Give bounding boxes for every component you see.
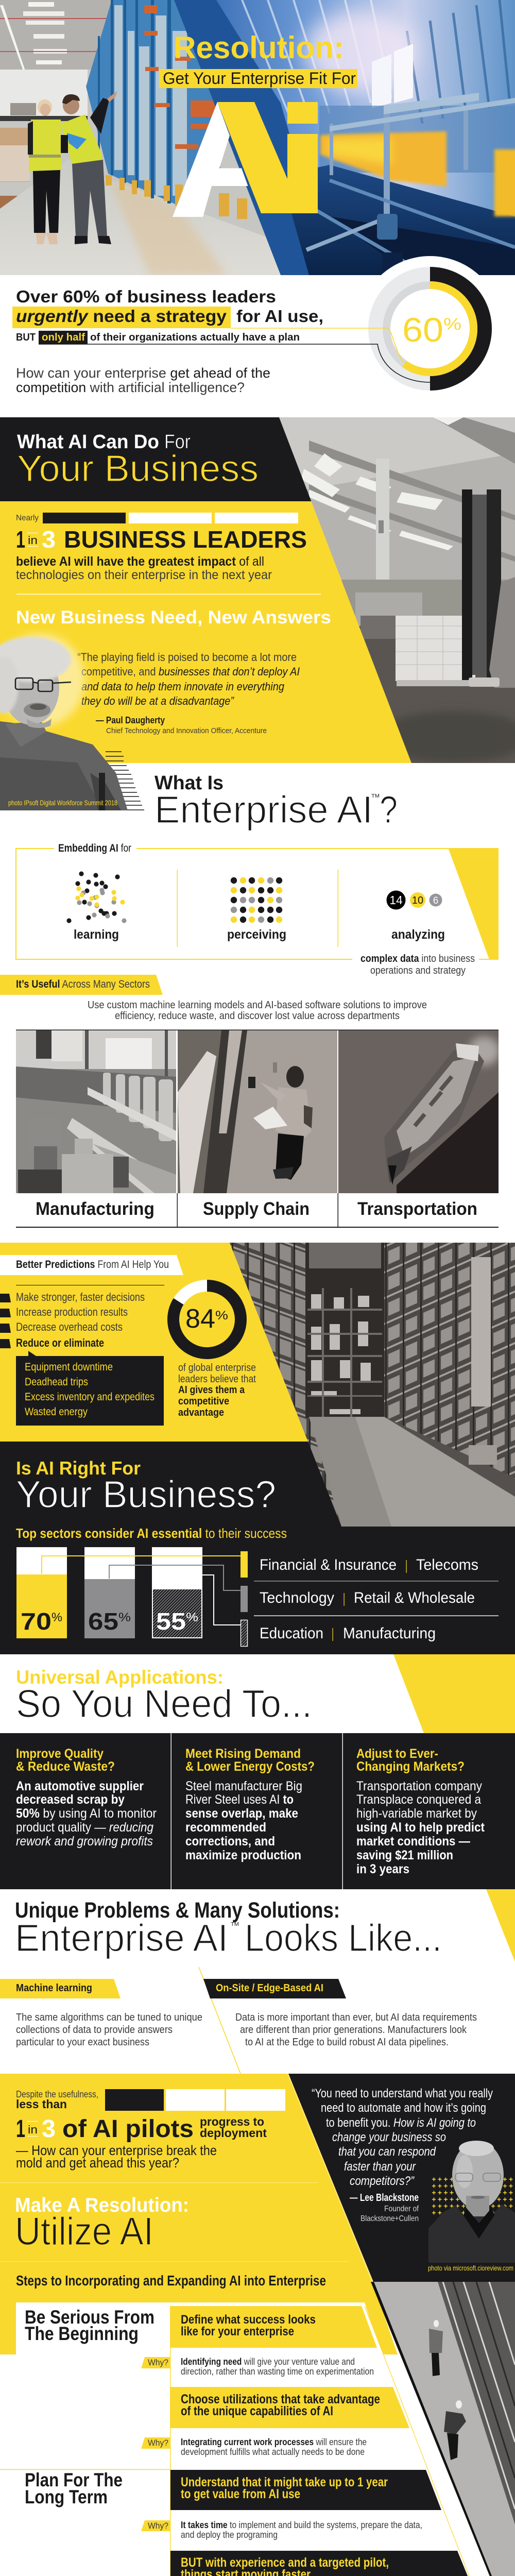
stat: 1 in 3 business leaders: 3 <box>42 526 56 553</box>
text: machine learning description: The same algorithms can be tuned to unique <box>16 2012 202 2023</box>
text: custom machine learning models: efficiency, reduce waste, and discover lost value across departments <box>115 1010 400 1022</box>
photo: portrait of Lee Blackstone <box>428 2141 515 2263</box>
column: improve quality: & Reduce Waste? <box>16 1759 115 1774</box>
step headings left <box>25 2307 161 2576</box>
text: competitive advantage: advantage <box>178 1407 224 1418</box>
stat: 1 in 3 AI pilots: mold and get ahead this year? <box>16 2155 179 2171</box>
donut chart: 84 percent <box>167 1280 247 1359</box>
step: understand one year: Understand that it might take up to 1 year <box>181 2475 388 2489</box>
panel: use case columns <box>0 1733 515 1889</box>
list: benefits: Reduce or eliminate <box>16 1336 104 1349</box>
quote: Paul Daugherty: “The playing field is poised to become a lot more <box>77 651 297 664</box>
column: improve quality: An automotive supplier <box>16 1779 144 1793</box>
column: meet rising demand <box>185 1747 315 1862</box>
label: Supply Chain: Supply Chain <box>203 1199 310 1219</box>
heading: steps: Steps to Incorporating and Expanding AI into Enterprise <box>16 2273 326 2289</box>
step: define success: like for your enterprise <box>181 2325 294 2338</box>
why: identifying need: Why? <box>148 2358 168 2367</box>
why: it takes time: It takes time to implement and build the systems, prepare the data, <box>181 2520 422 2530</box>
column: adjust to changing markets: market conditions — <box>356 1834 470 1849</box>
tab: on-site edge-based AI: On-Site / Edge-Based AI <box>216 1982 323 1994</box>
stat: 1 in 3 AI pilots: Despite the usefulness, <box>16 2089 98 2099</box>
why: integrating processes: development fulfills what actually needs to be done <box>181 2447 365 2457</box>
icon: learning scatter dots <box>66 871 127 923</box>
tab: useful across many sectors <box>0 975 163 995</box>
panel: Lee Blackstone quote <box>288 2074 515 2282</box>
step headings left: Long Term <box>25 2486 108 2507</box>
stat: 1 in 3 business leaders <box>16 513 307 582</box>
heading: is AI right: Your Business? <box>16 1473 276 1516</box>
stat: 1 in 3 AI pilots: in <box>28 2123 38 2136</box>
panel: is AI right for your business <box>16 1458 515 1654</box>
text: edge AI description: to AI at the Edge to build robust AI data pipelines. <box>245 2037 449 2048</box>
stat: 1 in 3 business leaders: BUSINESS LEADERS <box>64 526 307 553</box>
column: meet rising demand: Steel manufacturer Big <box>185 1779 302 1793</box>
heading: new business need: New Business Need, New Answers <box>16 607 331 628</box>
stat: 1 in 3 business leaders: in <box>28 534 38 547</box>
text: competitive advantage: leaders believe that <box>178 1374 256 1385</box>
quote text: faster than your <box>344 2160 416 2174</box>
column: meet rising demand: maximize production <box>185 1848 301 1862</box>
photo: warehouse aisle <box>230 1243 515 1527</box>
text: edge AI description: are different than prior generations. Manufacturers look <box>240 2024 467 2036</box>
heading: make a resolution <box>15 2194 189 2253</box>
panel: unique problems heading: TM <box>231 1922 239 1927</box>
tab: machine learning <box>0 1979 121 1998</box>
heading: what is Enterprise AI: TM <box>371 793 380 799</box>
labels: learning perceiving analyzing: perceiving <box>227 927 286 942</box>
quote: Paul Daugherty: Chief Technology and Innovation Officer, Accenture <box>106 727 267 735</box>
step: understand one year: to get value from AI use <box>181 2487 300 2501</box>
text: machine learning description: collections of data to provide answers <box>16 2024 173 2036</box>
donut chart: 60 percent: 60 <box>402 311 443 349</box>
stat: 1 in 3 business leaders: 1 <box>16 526 25 553</box>
text: custom machine learning models: Use custom machine learning models and AI-based software solutions to improve <box>88 999 427 1011</box>
bar chart: sectors <box>16 1547 202 1638</box>
column: improve quality: Improve Quality <box>16 1747 104 1761</box>
panel: universal applications heading: So You Need To... <box>16 1682 312 1726</box>
step: experience and pilot: BUT with experience and a targeted pilot, <box>181 2555 389 2570</box>
heading: what AI can do <box>17 431 259 489</box>
step: choose utilizations: of the unique capabilities of AI <box>181 2404 333 2418</box>
panel: universal applications heading: Universal Applications: <box>16 1667 224 1688</box>
caption: complex data: complex data into business <box>360 953 475 964</box>
heading: is AI right: Is AI Right For <box>16 1458 141 1479</box>
icon: analyzing number circles: 10 <box>412 895 423 906</box>
quote: Paul Daugherty <box>77 651 300 735</box>
column: improve quality: product quality — reducing <box>16 1820 153 1835</box>
headline text: Over 60% of business leaders <box>16 287 276 306</box>
column: adjust to changing markets: using AI to help predict <box>356 1820 485 1835</box>
panel: make a resolution <box>0 2074 515 2576</box>
tab: better predictions: Better Predictions From AI Help You <box>16 1259 169 1270</box>
stat: 1 in 3 business leaders: believe AI will have the greatest impact of all <box>16 554 264 569</box>
quote: Paul Daugherty: they do will be at a disadvantage” <box>81 694 235 707</box>
photo: manufacturing bottling line <box>16 1030 176 1193</box>
labels: learning perceiving analyzing: analyzing <box>391 927 445 942</box>
quote: Paul Daugherty: and data to help them innovate in everything <box>81 680 285 693</box>
column: adjust to changing markets: saving $21 million <box>356 1848 453 1862</box>
legend: sectors <box>241 1551 499 1647</box>
step: define success: Define what success looks <box>181 2313 316 2327</box>
column: meet rising demand: sense overlap, make <box>185 1806 298 1821</box>
panel: unique problems heading <box>15 1889 515 1962</box>
icon: analyzing number circles <box>386 890 442 910</box>
why: it takes time: Why? <box>148 2521 168 2531</box>
step headings left: Be Serious From <box>25 2307 154 2328</box>
legend: sectors: Retail & Wholesale <box>354 1589 475 1606</box>
why: integrating processes <box>141 2437 367 2457</box>
why: identifying need: Identifying need will give your venture value and <box>181 2357 355 2367</box>
heading: what is Enterprise AI: What Is <box>154 772 224 794</box>
quote text: that you can respond <box>338 2145 436 2159</box>
text: custom machine learning models <box>88 999 427 1022</box>
stat: 1 in 3 AI pilots: — How can your enterprise break the <box>16 2143 217 2158</box>
icon: analyzing number circles: 14 <box>389 893 403 907</box>
icon: male worker <box>61 91 117 244</box>
step headings left: Plan For The <box>25 2469 123 2490</box>
column: improve quality: 50% by using AI to monitor <box>16 1806 157 1821</box>
legend: sectors: Telecoms <box>416 1556 478 1573</box>
callout: waste list <box>16 1351 164 1426</box>
panel: unique problems heading: Unique Problems & Many Solutions: <box>15 1898 340 1923</box>
column: meet rising demand: recommended <box>185 1820 266 1835</box>
column: improve quality: rework and growing profits <box>16 1834 153 1849</box>
stat: 1 in 3 business leaders: Nearly <box>16 514 39 522</box>
text: machine learning description <box>16 2012 202 2048</box>
text: competitive advantage <box>178 1362 256 1418</box>
caption: complex data <box>360 953 475 976</box>
bar chart: sectors: % <box>118 1611 131 1624</box>
labels: learning perceiving analyzing: learning <box>74 927 119 942</box>
question text: competition with artificial intelligence? <box>16 380 245 395</box>
why: it takes time <box>141 2520 422 2540</box>
column: improve quality: decreased scrap by <box>16 1792 125 1807</box>
column: adjust to changing markets: in 3 years <box>356 1862 409 1876</box>
headline text: only half <box>42 332 85 343</box>
quote text: — Lee Blackstone <box>350 2192 419 2204</box>
decorative comb lines beside portrait <box>106 752 144 810</box>
panel: what AI can do <box>0 417 515 763</box>
why: identifying need <box>141 2357 374 2377</box>
title: Resolution: Resolution: <box>174 30 344 65</box>
legend: sectors: Technology <box>260 1589 334 1606</box>
stat: 1 in 3 AI pilots: deployment <box>200 2126 267 2140</box>
bar chart: sectors: % <box>52 1611 62 1624</box>
highlight bar <box>12 307 231 328</box>
bar chart: sectors: 65 <box>88 1608 118 1635</box>
donut chart: 60 percent: % <box>443 315 461 333</box>
bar chart: sectors: 55 <box>156 1608 186 1635</box>
bar chart: sectors: 70 <box>21 1608 52 1635</box>
list: benefits: Make stronger, faster decisions <box>16 1291 145 1303</box>
list: benefits: Increase production results <box>16 1306 128 1318</box>
column: meet rising demand: Meet Rising Demand <box>185 1747 301 1761</box>
headline text: for AI use, <box>236 307 323 326</box>
quote: Paul Daugherty: competitive, and businesses that don’t deploy AI <box>81 665 300 678</box>
quote text: competitors?” <box>350 2174 415 2188</box>
column: adjust to changing markets: Changing Markets? <box>356 1759 465 1774</box>
why: identifying need: direction, rather than wasting time on experimentation <box>181 2366 374 2377</box>
text: machine learning description: particular to your exact business <box>16 2037 149 2048</box>
headline text: BUT <box>16 332 36 343</box>
photo: warehouse with two workers <box>0 0 281 275</box>
list: benefits <box>0 1291 145 1349</box>
tab: useful across many sectors: It’s Useful Across Many Sectors <box>16 978 150 990</box>
column: adjust to changing markets: Transplace conquered a <box>356 1792 481 1807</box>
tab: machine learning: Machine learning <box>16 1982 92 1994</box>
subtitle banner: Get Your Enterprise Fit For <box>163 69 356 88</box>
quote text: Founder of <box>384 2205 419 2213</box>
heading: what is Enterprise AI: ? <box>380 788 398 831</box>
heading: is AI right: Top sectors consider AI essential to their success <box>16 1526 287 1541</box>
text: edge AI description <box>235 2012 477 2048</box>
headline text: of their organizations actually have a plan <box>90 332 300 343</box>
stat: 1 in 3 AI pilots: of AI pilots <box>62 2115 194 2143</box>
column: adjust to changing markets: high-variable market by <box>356 1806 477 1821</box>
photo: transportation container ship <box>338 1030 500 1193</box>
callout: waste list: Wasted energy <box>25 1406 88 1418</box>
photo: portrait of Paul Daugherty <box>0 634 128 810</box>
why: integrating processes: Why? <box>148 2438 168 2448</box>
big letters: AI <box>173 102 318 217</box>
question text: How can your enterprise get ahead of the <box>16 365 270 381</box>
heading: what AI can do: What AI Can Do <box>17 431 159 453</box>
photo: forklift in warehouse <box>278 417 515 763</box>
headline text: urgently need a strategy <box>16 307 227 326</box>
headline text <box>16 287 323 344</box>
stat: 1 in 3 AI pilots: 3 <box>42 2115 56 2143</box>
caption: complex data: operations and strategy <box>370 965 466 976</box>
legend: sectors: Education <box>260 1625 323 1642</box>
column: adjust to changing markets <box>356 1747 485 1876</box>
stat: 1 in 3 AI pilots: progress to <box>200 2115 264 2128</box>
donut chart: 84 percent: 84 <box>185 1304 215 1334</box>
stat: 1 in 3 AI pilots <box>16 2089 285 2171</box>
heading: make a resolution: Make A Resolution: <box>15 2194 189 2216</box>
panel: sectors <box>16 1029 500 1228</box>
question text <box>16 365 270 395</box>
step: define success <box>170 2306 377 2348</box>
text: competitive advantage: competitive <box>178 1396 229 1407</box>
bar chart: sectors: % <box>186 1611 198 1624</box>
legend: sectors: Financial & Insurance <box>260 1556 397 1573</box>
panel: better predictions <box>0 1243 515 1654</box>
column: improve quality <box>16 1747 157 1849</box>
tab: on-site edge-based AI <box>203 1979 346 1998</box>
tab: better predictions <box>0 1255 183 1275</box>
heading: what is Enterprise AI: Enterprise AI <box>154 788 373 831</box>
panel: universal applications heading <box>16 1654 515 1733</box>
quote text <box>312 2087 493 2223</box>
list: benefits: Decrease overhead costs <box>16 1320 123 1333</box>
text: competitive advantage: AI gives them a <box>178 1384 245 1396</box>
callout: waste list: Equipment downtime <box>25 1361 113 1373</box>
panel: steps table <box>0 2302 515 2576</box>
stat: 1 in 3 AI pilots: 1 <box>16 2115 25 2143</box>
callout: waste list: Excess inventory and expedites <box>25 1391 154 1403</box>
photo: blue juice production line <box>174 0 515 275</box>
heading: what AI can do: Your Business <box>17 448 259 489</box>
donut chart: 60 percent <box>357 256 503 401</box>
column: adjust to changing markets: Transportation company <box>356 1779 482 1793</box>
legend: sectors: Manufacturing <box>343 1625 436 1642</box>
heading: make a resolution: Utilize AI <box>15 2210 153 2253</box>
photo: supply chain worker <box>178 1030 337 1193</box>
panel: embedding AI <box>16 842 499 976</box>
step: understand one year <box>170 2470 441 2510</box>
step: choose utilizations <box>170 2387 409 2428</box>
why: integrating processes: Integrating current work processes will ensure the <box>181 2437 367 2447</box>
why: it takes time: and deploy the programing <box>181 2530 278 2540</box>
icon: analyzing number circles: 6 <box>433 895 438 906</box>
stat: 1 in 3 business leaders: technologies on their enterprise in the next year <box>16 568 272 582</box>
label: Transportation: Transportation <box>357 1199 477 1219</box>
quote text: change your business so <box>332 2130 446 2144</box>
panel: unique problems heading: Enterprise AI <box>15 1917 228 1959</box>
photo: overhead warehouse workers <box>360 2282 515 2576</box>
callout: waste list: Deadhead trips <box>25 1376 88 1388</box>
panel: 60 percent intro <box>0 256 515 417</box>
column: adjust to changing markets: Adjust to Ever- <box>356 1747 438 1761</box>
quote text: to benefit you. How is AI going to <box>326 2116 476 2130</box>
label: Manufacturing: Manufacturing <box>36 1199 154 1219</box>
text: edge AI description: Data is more important than ever, but AI data requirements <box>235 2012 477 2023</box>
heading: what is Enterprise AI <box>154 772 398 831</box>
step: choose utilizations: Choose utilizations that take advantage <box>181 2392 380 2406</box>
icon: perceiving dot grid <box>231 877 282 923</box>
quote text: need to automate and how it’s going <box>321 2101 486 2115</box>
text: competitive advantage: of global enterprise <box>178 1362 256 1374</box>
panel: unique problems heading: Looks Like... <box>245 1917 442 1959</box>
labels: learning perceiving analyzing <box>74 927 445 942</box>
step headings left: The Beginning <box>25 2323 139 2344</box>
column: meet rising demand: & Lower Energy Costs? <box>185 1759 315 1774</box>
quote: Paul Daugherty: — Paul Daugherty <box>96 715 165 725</box>
stat: 1 in 3 AI pilots: less than <box>16 2097 67 2111</box>
label: embedding AI for: Embedding AI for <box>58 842 131 854</box>
heading: is AI right <box>16 1458 287 1541</box>
donut chart: 84 percent: % <box>215 1309 228 1323</box>
icon: female worker <box>28 99 62 244</box>
panel: hero <box>0 0 515 275</box>
column: meet rising demand: corrections, and <box>185 1834 275 1849</box>
column: meet rising demand: River Steel uses AI to <box>185 1792 294 1807</box>
heading: what AI can do: For <box>164 431 191 453</box>
step: experience and pilot <box>170 2551 474 2576</box>
photo: portrait of Paul Daugherty: photo IPsoft Digital Workforce Summit 2018 <box>8 799 117 807</box>
quote text: Blackstone+Cullen <box>360 2214 419 2223</box>
